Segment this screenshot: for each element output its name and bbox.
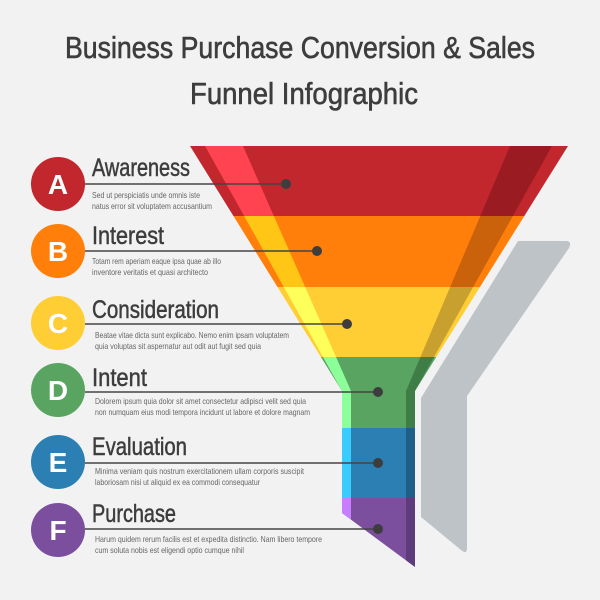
step E: Evaluation <box>92 433 187 461</box>
step F: Purchase <box>92 500 176 528</box>
step D <box>31 363 383 417</box>
step C: C <box>48 308 68 339</box>
step A: Awareness <box>92 154 190 182</box>
step A: A <box>48 169 68 200</box>
funnel <box>190 146 568 567</box>
step D: non numquam eius modi tempora incidunt ut labore et dolore magnam <box>95 407 310 417</box>
step A: natus error sit voluptatem accusantium <box>92 201 212 211</box>
step B: Totam rem aperiam eaque ipsa quae ab illo <box>92 256 221 266</box>
icon: gray funnel shadow <box>421 241 570 552</box>
step D: D <box>48 375 68 406</box>
step F: Harum quidem rerum facilis est et expedita distinctio. Nam libero tempore <box>95 534 322 544</box>
step B: Interest <box>92 222 164 250</box>
step B: inventore veritatis et quasi architecto <box>92 267 208 277</box>
step B <box>31 222 322 278</box>
title: Business Purchase Conversion & Sales <box>65 30 535 65</box>
step C: Consideration <box>92 296 219 324</box>
step A <box>31 154 291 211</box>
title: Funnel Infographic <box>190 76 418 111</box>
step C: Beatae vitae dicta sunt explicabo. Nemo enim ipsam voluptatem <box>95 330 289 340</box>
step B: B <box>48 236 68 267</box>
step E: laboriosam nisi ut aliquid ex ea commodi consequatur <box>95 477 260 487</box>
step C: quia voluptas sit aspernatur aut odit aut fugit sed quia <box>95 341 261 351</box>
step E <box>31 433 383 489</box>
step D: Intent <box>92 364 147 392</box>
step A: Sed ut perspiciatis unde omnis iste <box>92 190 200 200</box>
step E: Minima veniam quis nostrum exercitationem ullam corporis suscipit <box>95 466 305 476</box>
step D: Dolorem ipsum quia dolor sit amet consectetur adipisci velit sed quia <box>95 396 306 406</box>
step C <box>31 296 352 351</box>
step F: cum soluta nobis est eligendi optio cumque nihil <box>95 545 244 555</box>
step F: F <box>49 515 67 546</box>
step E: E <box>49 447 67 478</box>
step F <box>31 500 383 557</box>
title <box>65 30 535 111</box>
